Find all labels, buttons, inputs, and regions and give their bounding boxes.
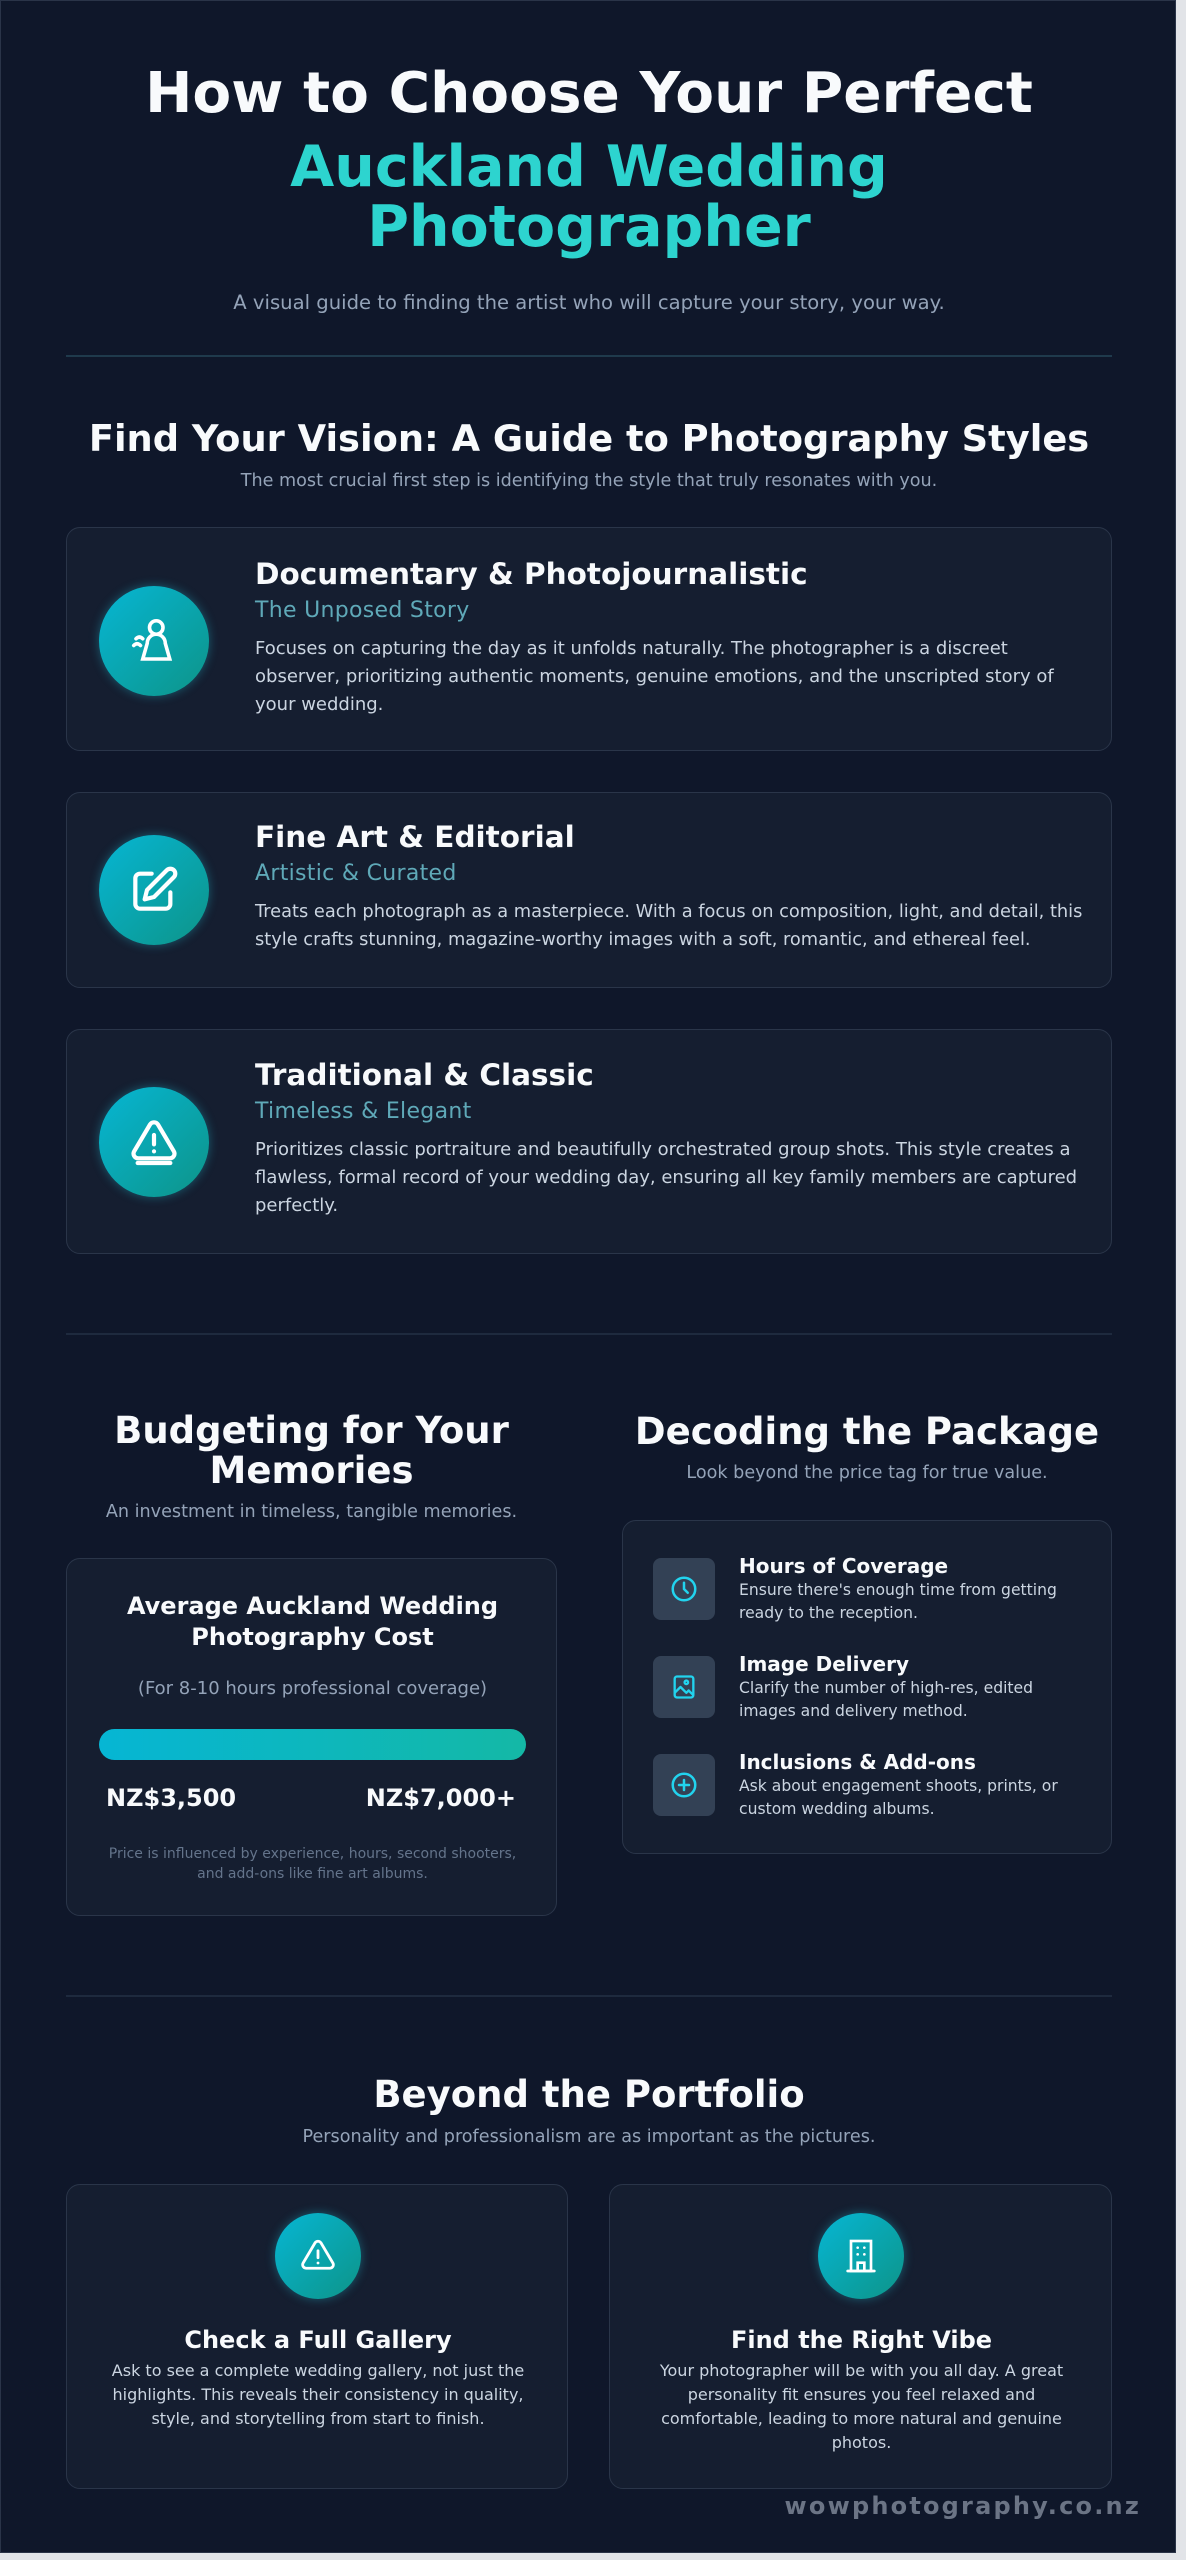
- item: inclusions: Ask about engagement shoots, prints, or custom wedding albums.: [739, 1777, 1058, 1818]
- panel: cost: [66, 1558, 557, 1916]
- text: fine art: [254, 820, 1082, 950]
- item: delivery: [653, 1652, 1033, 1720]
- heading: package: Decoding the Package: [635, 1410, 1099, 1453]
- cost title: Average Auckland Wedding: [127, 1592, 498, 1620]
- title: Photographer: [367, 194, 811, 260]
- icon: image: [653, 1656, 715, 1718]
- icon: building: [818, 2213, 904, 2299]
- icon: clock: [653, 1558, 715, 1620]
- text: vibe: Your photographer will be with you all day. A great personality fit ensures you feel relaxed and comfortable, leading to more natural and genuine photos.: [660, 2361, 1063, 2452]
- title: Auckland Wedding: [290, 134, 888, 200]
- subheading: beyond: Personality and professionalism are as important as the pictures.: [302, 2127, 875, 2147]
- text: vibe: Find the Right Vibe: [731, 2326, 992, 2354]
- item: delivery: Image Delivery: [739, 1652, 909, 1676]
- item: inclusions: Inclusions & Add-ons: [739, 1750, 976, 1774]
- subheading: package: Look beyond the price tag for true value.: [686, 1463, 1048, 1483]
- panel: vibe: [609, 2184, 1112, 2489]
- item: hours: Hours of Coverage: [739, 1554, 948, 1578]
- text: gallery: Check a Full Gallery: [184, 2326, 452, 2354]
- item: hours: Ensure there's enough time from getting ready to the reception.: [739, 1581, 1057, 1622]
- footer watermark: wowphotography.co.nz: [785, 2492, 1141, 2520]
- title: [145, 61, 1033, 260]
- text: documentary: The Unposed Story: [255, 598, 470, 623]
- panel: documentary: [66, 527, 1112, 751]
- price low: NZ$3,500: [106, 1784, 236, 1812]
- panel: gallery: [66, 2184, 568, 2489]
- icon: pencil: [99, 835, 209, 945]
- item: delivery: Clarify the number of high-res, edited images and delivery method.: [739, 1679, 1033, 1720]
- subheading: styles: The most crucial first step is identifying the style that truly resonates with you.: [241, 471, 937, 491]
- icon: person: [99, 586, 209, 696]
- coverage note: (For 8-10 hours professional coverage): [138, 1678, 487, 1699]
- icon: warning: [275, 2213, 361, 2299]
- cost title: Photography Cost: [191, 1623, 434, 1651]
- cost title: [127, 1592, 498, 1651]
- text: traditional: Timeless & Elegant: [255, 1099, 472, 1124]
- panel: fine art: [66, 792, 1112, 988]
- panel: package: [622, 1520, 1112, 1854]
- text: traditional: Prioritizes classic portraiture and beautifully orchestrated group shots. This style creates a flawless, formal record of your wedding day, ensuring all key family members are captured perfectly.: [255, 1139, 1077, 1216]
- price high: NZ$7,000+: [366, 1784, 516, 1812]
- title: How to Choose Your Perfect: [145, 61, 1033, 126]
- icon: plus: [653, 1754, 715, 1816]
- text: documentary: [254, 557, 1054, 715]
- subheading: budgeting: An investment in timeless, tangible memories.: [106, 1502, 517, 1522]
- text: documentary: Documentary & Photojournalistic: [255, 557, 808, 591]
- text: fine art: Artistic & Curated: [255, 861, 457, 886]
- icon: warning: [99, 1087, 209, 1197]
- text: gallery: [112, 2326, 524, 2428]
- panel: traditional: [66, 1029, 1112, 1254]
- text: fine art: Fine Art & Editorial: [255, 820, 575, 854]
- price factors: Price is influenced by experience, hours, second shooters, and add-ons like fine art albums.: [109, 1846, 516, 1882]
- price bar: [99, 1729, 526, 1760]
- heading: styles: Find Your Vision: A Guide to Photography Styles: [89, 417, 1089, 460]
- heading: budgeting: Budgeting for Your Memories: [114, 1409, 509, 1492]
- text: traditional: Traditional & Classic: [255, 1058, 594, 1092]
- text: traditional: [254, 1058, 1077, 1216]
- text: documentary: Focuses on capturing the day as it unfolds naturally. The photographer is a discreet observer, prioritizing authentic moments, genuine emotions, and the unscripted story of your wedding.: [255, 638, 1054, 715]
- text: fine art: Treats each photograph as a masterpiece. With a focus on composition, light, and detail, this style crafts stunning, magazine-worthy images with a soft, romantic, and ethereal feel.: [255, 901, 1082, 950]
- item: hours: [653, 1554, 1057, 1622]
- subtitle: A visual guide to finding the artist who will capture your story, your way.: [233, 291, 945, 314]
- text: gallery: Ask to see a complete wedding gallery, not just the highlights. This reveals their consistency in quality, style, and storytelling from start to finish.: [112, 2361, 524, 2428]
- item: inclusions: [653, 1750, 1058, 1818]
- heading: beyond: Beyond the Portfolio: [373, 2073, 805, 2116]
